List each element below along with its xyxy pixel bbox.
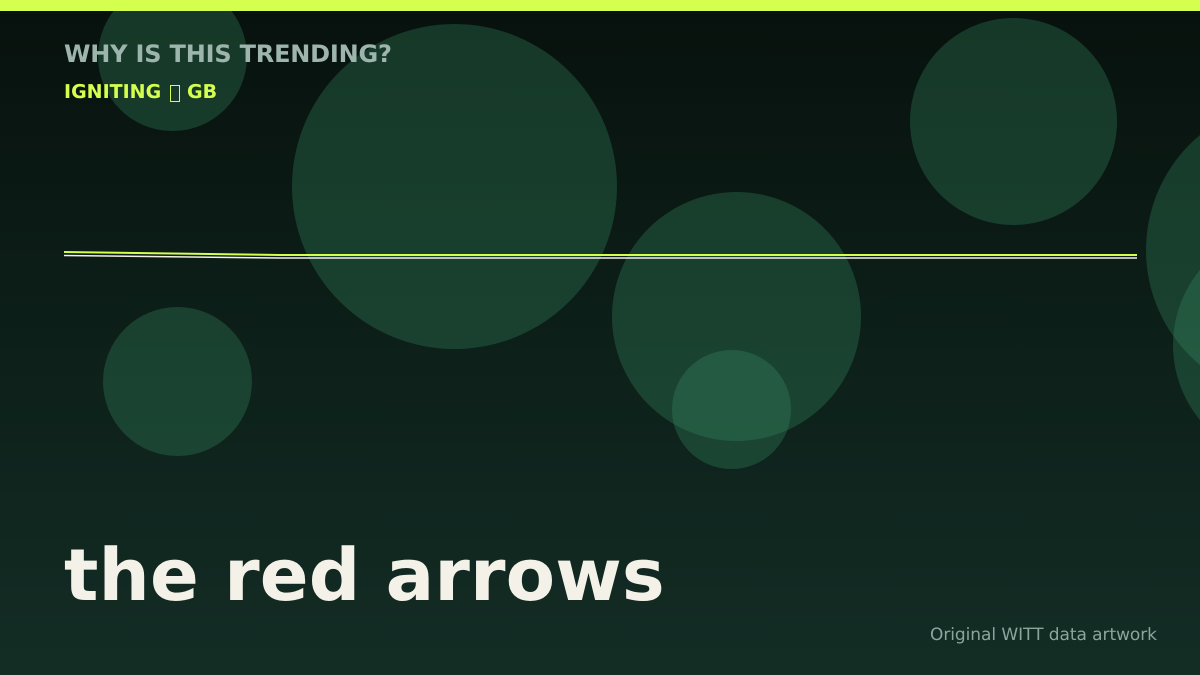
footer credit: Original WITT data artwork [930,625,1157,645]
line: lime trend [64,252,1137,255]
bubble: lower left [103,307,252,456]
trend lines [64,252,1137,258]
line: white trend [64,256,1137,258]
bubble: top left [98,0,247,131]
top accent bar [0,0,1200,11]
bubble: large centre [292,24,617,349]
region label: GB [187,81,217,103]
bubble: right edge upper [1146,100,1200,400]
status line [64,81,217,103]
bubble cluster [98,0,1200,469]
bubble: middle [612,192,861,441]
status label: IGNITING [64,81,161,103]
bubble: small overlap [672,350,791,469]
missing glyph box [170,86,180,102]
bubble: right edge lower [1173,227,1200,463]
main title: the red arrows [64,533,665,617]
eyebrow heading: WHY IS THIS TRENDING? [64,40,392,68]
bubble: upper right [910,18,1117,225]
